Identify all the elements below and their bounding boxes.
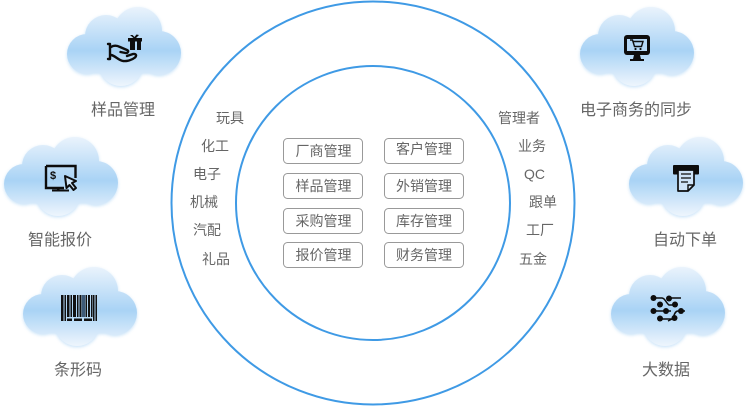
right industry labels: 五金 [519, 251, 547, 267]
button: 采购管理 [284, 208, 362, 234]
right industry labels: QC [524, 166, 545, 182]
label: 智能报价: 智能报价 [28, 231, 92, 249]
right industry labels [498, 110, 557, 267]
button: 外销管理: 外销管理 [396, 178, 452, 194]
label: 样品管理: 样品管理 [91, 101, 155, 119]
icon: hand with gift [108, 34, 142, 61]
button: 库存管理: 库存管理 [396, 213, 452, 229]
left industry labels: 汽配 [193, 222, 221, 238]
cloud: 自动下单 [629, 137, 743, 217]
button: 厂商管理: 厂商管理 [296, 143, 352, 159]
button: 库存管理 [384, 208, 464, 234]
cloud: 大数据 [611, 267, 725, 347]
button: 财务管理: 财务管理 [396, 247, 452, 263]
cloud: 条形码 [23, 267, 137, 347]
icon: monitor with cart [624, 35, 650, 61]
icon: barcode [61, 295, 97, 321]
left industry labels: 化工 [201, 138, 229, 154]
right industry labels: 管理者 [498, 110, 540, 126]
button: 报价管理: 报价管理 [296, 247, 352, 263]
right industry labels: 工厂 [526, 222, 554, 238]
button: 报价管理 [284, 242, 362, 268]
button: 客户管理: 客户管理 [396, 141, 452, 157]
left industry labels: 礼品 [202, 251, 230, 267]
button: 采购管理: 采购管理 [296, 213, 352, 229]
outer ring [172, 2, 574, 404]
icon: circuit nodes [650, 295, 685, 322]
label: 大数据: 大数据 [642, 361, 690, 379]
label: 电子商务的同步: 电子商务的同步 [580, 101, 692, 119]
label: 自动下单: 自动下单 [653, 231, 717, 249]
left industry labels: 电子 [193, 166, 221, 182]
icon: monitor with dollar and cursor: $ [50, 170, 56, 182]
icon: printer with document [673, 165, 699, 191]
button: 样品管理 [284, 174, 362, 198]
label: 条形码: 条形码 [54, 361, 102, 379]
cloud: 样品管理 [67, 7, 181, 87]
button: 客户管理 [384, 138, 464, 164]
button: 财务管理 [384, 242, 464, 268]
cloud: 智能报价 [4, 137, 118, 217]
panel: module buttons [284, 138, 464, 268]
inner ring [236, 66, 510, 340]
button: 外销管理 [384, 174, 464, 198]
button: 厂商管理 [284, 138, 362, 164]
left industry labels: 机械 [190, 194, 218, 210]
left industry labels: 玩具 [216, 110, 244, 126]
button: 样品管理: 样品管理 [296, 178, 352, 194]
right industry labels: 跟单 [529, 194, 557, 210]
cloud: 电子商务的同步 [580, 7, 694, 87]
left industry labels [190, 110, 244, 267]
right industry labels: 业务 [518, 138, 546, 154]
